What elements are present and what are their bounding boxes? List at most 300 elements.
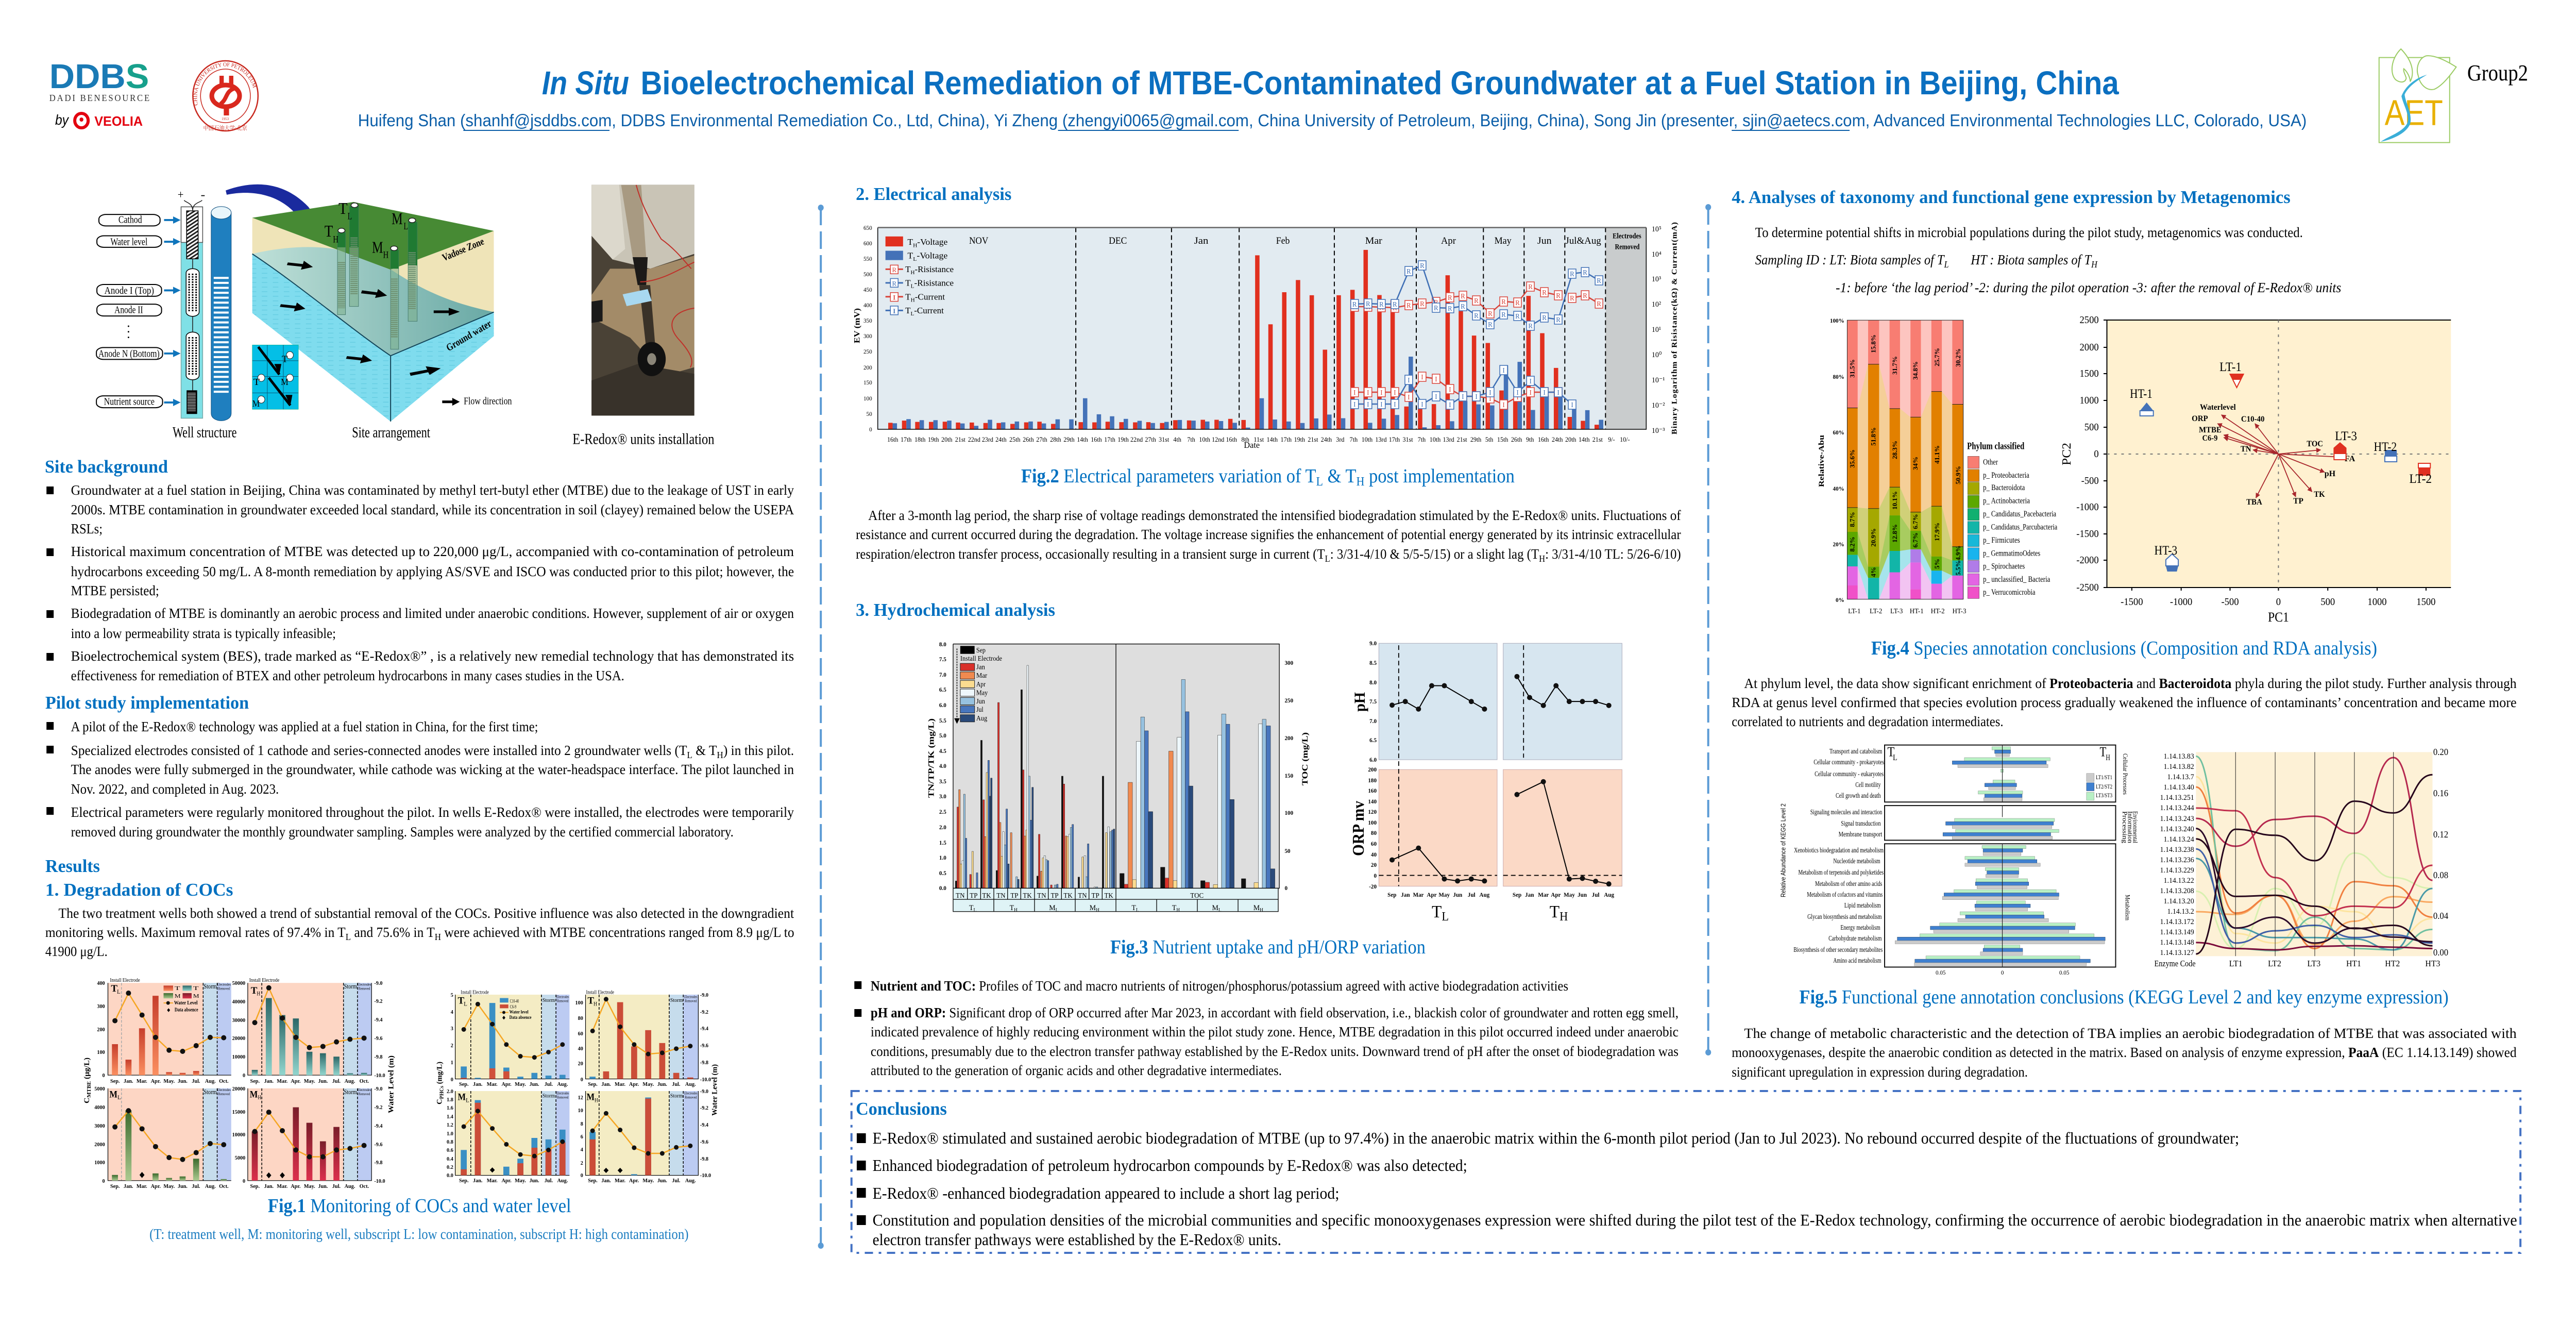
KEGG category labels: Biosynthesis of other secondary metabolites [1793, 946, 1883, 953]
enzyme labels: Enzyme Code [2155, 958, 2196, 968]
text: enzyme discussion: monooxygenases, despite the anaerobic condition as detected in the matrix. Based on analysis of enzyme expression, PaaA (EC 1.14.13.149) showed [1732, 1045, 2517, 1060]
pH and ORP labels: Jan [1525, 892, 1534, 898]
Fig.1 tick labels: -9.4 [374, 1123, 383, 1129]
Fig.3 axis labels: TK [1104, 892, 1113, 899]
pilot text: Nov. 2022, and completed in Aug. 2023. [71, 781, 279, 797]
Fig.2 axis labels: 26th [1511, 436, 1522, 443]
RDA vector labels: TP [2293, 497, 2303, 506]
Fig.1 tick labels: Sep. [459, 1082, 469, 1087]
conclusion text: Enhanced biodegradation of petroleum hydrocarbon compounds by E-Redox® was also detected; [873, 1156, 1467, 1175]
chart: Fig.2 electrical parameters: -Voltage [917, 238, 947, 247]
pH and ORP labels: 40 [1371, 851, 1377, 858]
Fig.3 axis labels: 5.5 [939, 717, 946, 724]
Fig.3 axis labels: TP [970, 892, 977, 899]
Fig.3 axis labels: TP [1010, 892, 1019, 899]
Fig.1 tick labels: Jan. [264, 1079, 274, 1084]
conclusion text [873, 1129, 2517, 1249]
Fig.1 tick labels: 5000 [235, 1155, 245, 1161]
Fig.3 axis labels: 0.5 [939, 870, 946, 877]
percentage labels: 34.8% [1912, 361, 1919, 380]
text: electrical analysis discussion: respiration/electron transfer process, occasionally resulting in a transient surge in current (T [856, 546, 1330, 562]
label arrows [164, 216, 181, 406]
phylum legend: p_ Proteobacteria [1983, 471, 2029, 479]
Fig.1 tick labels: 30000 [232, 1018, 245, 1024]
pH and ORP labels: Sep [1387, 892, 1397, 898]
Fig.2 axis labels: 29th [1063, 436, 1075, 443]
Fig.4 composition axis labels: 20% [1833, 541, 1844, 548]
enzyme grid lines [2235, 752, 2394, 956]
pH and ORP labels: ORP mv [1350, 800, 1368, 856]
Fig.3 axis labels: H [1176, 908, 1180, 913]
enzyme labels: LT1 [2229, 958, 2243, 968]
Fig.2 axis labels: 24th [1321, 436, 1332, 443]
hydrochemical text [871, 978, 1679, 1078]
Fig.3 axis labels: L [1136, 908, 1139, 913]
text: p_ Candidatus_Parcubacteria [1983, 523, 2058, 531]
Fig.2 axis labels: 10⁴ [1652, 250, 1662, 259]
legend: R [892, 280, 896, 287]
Fig.2 axis labels: 300 [863, 333, 872, 340]
KEGG category labels: Metabolism of terpenoids and polyketides [1799, 868, 1884, 876]
center line [2002, 745, 2003, 967]
Fig.1 axis titles: Water Level (m) [710, 1064, 719, 1116]
MTBE panels: Electrodes [217, 982, 231, 986]
Fig.1 tick labels: Jul. [192, 1079, 200, 1084]
Fig.1 tick labels: 10000 [232, 1132, 245, 1138]
Fig.1 tick labels: 0 [103, 1179, 105, 1184]
enzyme labels: 1.14.13.172 [2160, 918, 2194, 926]
Fig.1 tick labels: 100 [575, 1000, 583, 1006]
Fig.3 axis labels: 4.0 [939, 763, 946, 769]
enzyme labels: 1.14.13.2 [2167, 908, 2194, 916]
RDA vector labels: C10-40 [2241, 415, 2265, 424]
Fig.1 tick labels: 15000 [232, 1110, 245, 1115]
Fig.2 axis labels: 14th [1077, 436, 1088, 443]
Fig.2 axis labels: 14th [1267, 436, 1278, 443]
enzyme plot background [2196, 752, 2432, 956]
Fig.1 tick labels: Apr. [629, 1178, 639, 1184]
Fig.1 tick labels: Jul. [672, 1178, 681, 1184]
KEGG side titles: 0.05 [2059, 969, 2070, 976]
PHC panels: L [466, 1097, 469, 1103]
Fig.3 axis labels: 3.0 [939, 793, 946, 800]
panel: pilot study implementation [45, 693, 794, 840]
Fig.2 axis labels: 27th [1145, 436, 1157, 443]
pH and ORP labels: 6.5 [1369, 737, 1377, 744]
heading: metagenomics: 4. Analyses of taxonomy and functional gene expression by Metagenomics [1732, 188, 2291, 207]
Fig.3 axis labels: TN/TP/TK (mg/L) [926, 718, 936, 798]
caption: Fig.1: Fig.1 Monitoring of COCs and water level [268, 1195, 571, 1216]
month labels: Jul&Aug [1565, 236, 1601, 246]
Fig.4 composition axis labels: HT-3 [1953, 607, 1967, 615]
Fig.1 tick labels: 1.4 [447, 1114, 454, 1120]
background text: effectiveness for remediation of BTEX and other petroleum hydrocarbons in many cases studies in the USA. [71, 668, 624, 683]
text: metagenomics intro: Sampling ID : LT: Biota samples of T [1755, 252, 1950, 267]
KEGG side titles [1780, 753, 2139, 976]
Fig.4 composition axis labels: 0% [1836, 597, 1844, 603]
month labels: NOV [969, 236, 988, 246]
heading: conclusions: Conclusions [856, 1099, 947, 1119]
KEGG category labels: Metabolism of cofactors and vitamins [1807, 891, 1883, 898]
Fig.1 tick labels: Oct. [219, 1184, 229, 1189]
Fig.1 tick labels: Aug. [345, 1079, 355, 1084]
Fig.1 tick labels: Sep. [110, 1079, 120, 1084]
series: TH resistance: RRRRRRRRRRRRRRRRRRR [1352, 283, 1601, 317]
Fig.1 tick labels: 3000 [94, 1123, 105, 1129]
Fig.2 axis labels: 21st [955, 436, 965, 443]
text: phylum level discussion: At phylum level, the data show significant enrichment of Proteobacteria and Bacteroidota phyla during the pilot study. Further analysis through [1744, 676, 2517, 691]
PHC panels: Data absence [510, 1015, 531, 1020]
Fig.1 tick labels: 8 [581, 1121, 583, 1127]
RDA vector labels: FA [2345, 455, 2355, 463]
MTBE panels: M [175, 993, 181, 999]
Fig.1 tick labels: May. [642, 1082, 654, 1087]
Fig.1 tick labels: Jan. [473, 1178, 483, 1184]
Fig.1 tick labels: Mar. [137, 1079, 147, 1084]
MTBE panels: Water Level [174, 1000, 198, 1006]
pH and ORP labels: L [1442, 910, 1449, 924]
enzyme labels: 0.08 [2433, 870, 2448, 880]
enzyme curves [2196, 756, 2432, 954]
Fig.2 axis labels: 10⁻³ [1652, 427, 1665, 435]
pH and ORP series [1392, 677, 1609, 884]
RDA axes labels: -500 [2221, 596, 2239, 608]
well label pills: Water level [110, 236, 147, 247]
Fig.1 tick labels: Jan. [264, 1184, 274, 1189]
Fig.4 composition axis labels [1817, 317, 1967, 615]
Fig.2 axis labels: 11st [1253, 436, 1264, 443]
Fig.1 tick labels: 6 [581, 1134, 583, 1140]
Fig.2 axis labels: 50 [867, 411, 872, 417]
background text: Bioelectrochemical system (BES), trade marked as “E-Redox®” , is a relatively new remedial technology that has demonstrated its [71, 648, 794, 664]
MTBE panels: M [193, 993, 199, 999]
Fig.1 tick labels: Apr. [629, 1082, 639, 1087]
Fig.1 tick labels: Jul. [332, 1184, 341, 1189]
rotated block labels: Ground water [445, 318, 494, 354]
Fig.1 axis titles: C [435, 1098, 444, 1104]
logo: AET [2379, 49, 2456, 143]
pH and ORP labels: 0 [1374, 873, 1377, 879]
text: electrical analysis discussion: After a 3-month lag period, the sharp rise of voltage readings demonstrated the intensified biodegradation stimulated by the E-Redox® units. Fluctuations of [868, 508, 1681, 523]
text: metagenomics intro: H [2091, 259, 2098, 270]
Fig.2 axis labels: 19th [1117, 436, 1129, 443]
text: enzyme discussion: significant upregulation in expression during degradation. [1732, 1064, 2028, 1080]
Fig.3 axis labels: 2.5 [939, 809, 946, 815]
Fig.2 axis labels: 400 [863, 302, 872, 309]
Fig.1 tick labels: 20 [578, 1061, 583, 1067]
Fig.2 axis labels: 10⁰ [1652, 351, 1662, 359]
Fig.3 axis labels: TK [1063, 892, 1073, 899]
text: electrical analysis discussion: resistance and current occurred during the degradation. The voltage increase signifies the enhancement of potential energy generated by its intrinsic extracellular [856, 527, 1681, 542]
percentage labels: 8.2% [1849, 536, 1856, 552]
Fig.3 axis labels [926, 641, 1310, 913]
enzyme labels: 1.14.13.20 [2164, 897, 2194, 905]
Fig.1 tick labels: -9.4 [374, 1017, 383, 1023]
KEGG side titles: Metabolism [2124, 895, 2131, 920]
Fig.1 tick labels: Aug. [557, 1178, 568, 1184]
Fig.1 tick labels: 4000 [94, 1105, 105, 1111]
KEGG category labels: Signal transduction [1841, 819, 1881, 827]
heading: pilot study: Pilot study implementation [45, 693, 249, 713]
logo: China University of Petroleum: CHINA UNIVERSITY OF PETROLEUM [194, 62, 257, 105]
enzyme labels: 1.14.13.22 [2164, 877, 2194, 885]
Fig.2 axis labels: 10⁻² [1652, 401, 1665, 410]
Fig.1 tick labels: -10.0 [374, 1179, 385, 1184]
KEGG category labels: Glycan biosynthesis and metabolism [1807, 913, 1882, 920]
Fig.2 axis labels: 13rd [1375, 436, 1387, 443]
Fig.3 axis labels: T [1172, 904, 1182, 913]
Fig.3 axis labels: 100 [1284, 810, 1293, 816]
pH and ORP labels: T [1432, 902, 1442, 921]
bullets [46, 722, 54, 815]
site block: H [333, 234, 338, 245]
nutrient bars [955, 665, 1115, 888]
Fig.1 tick labels: 0 [243, 1179, 245, 1184]
percentage labels: 25.7% [1934, 348, 1941, 366]
Fig.3 axis labels: 3.5 [939, 778, 946, 785]
RDA sample labels [2130, 360, 2432, 558]
RDA vector labels: ORP [2192, 414, 2208, 423]
Fig.1 tick labels: 4 [451, 1010, 453, 1015]
caption: Fig.2: & T [1323, 465, 1357, 487]
KEGG category labels: Energy metabolism [1840, 924, 1880, 931]
PHC panels: H [594, 1000, 597, 1007]
well body with electrodes [178, 188, 205, 418]
nutrient legend: Jun [976, 697, 985, 706]
legend: L [910, 310, 914, 317]
Fig.1 tick labels: -9.0 [374, 981, 383, 986]
nutrient legend [954, 646, 1002, 724]
Fig.2 axis labels: 200 [863, 364, 872, 371]
Fig.1 tick labels: Jun. [318, 1184, 328, 1189]
nutrient legend: Install Electrode [960, 655, 1002, 663]
MTBE panels: Removed [218, 986, 230, 991]
Fig.1 tick labels: 300 [97, 1004, 105, 1010]
KEGG category labels: Membrane transport [1839, 830, 1882, 838]
well label pills: Cathod [118, 214, 142, 225]
logo: DDBS by Veolia: DADI BENESOURCE [49, 93, 149, 103]
RDA axes labels: 0 [2094, 448, 2099, 460]
Fig.2 axis labels: 28th [1050, 436, 1061, 443]
RDA axes labels: 1000 [2079, 395, 2099, 406]
Fig.1 tick labels: Apr. [291, 1184, 301, 1189]
Fig.2 axis labels: 19th [1294, 436, 1306, 443]
enzyme labels: HT2 [2385, 958, 2400, 968]
phylum legend: p_ Actinobacteria [1983, 496, 2030, 505]
Fig.1 tick labels: May. [515, 1082, 526, 1087]
pH and ORP labels: Mar [1538, 892, 1549, 898]
RDA axes labels: 1500 [2079, 368, 2099, 379]
chart: Fig.1 MTBE and PHC monitoring [82, 977, 719, 1189]
pH and ORP labels: Jun [1453, 892, 1463, 898]
phylum legend: p_ Verrucomicrobia [1983, 588, 2036, 596]
Fig.4 composition axis labels: HT-2 [1931, 607, 1945, 615]
Fig.1 tick labels: -9.2 [700, 1010, 708, 1015]
enzyme labels [2155, 747, 2448, 968]
RDA axes labels: 1500 [2416, 596, 2435, 608]
stacked columns [1847, 320, 1963, 599]
Fig.2 axis labels: 25th [1009, 436, 1021, 443]
photo: E-Redox installation [591, 185, 694, 415]
Fig.1 axis titles: C [82, 1097, 91, 1103]
hydrochemical text: indicated prevalence of highly reducing environment within the pilot study zone. Hence, MTBE degradation in this pilot occurred indeed under anaerobic [871, 1024, 1679, 1039]
results text: H [435, 932, 441, 942]
KEGG legend [2087, 774, 2112, 800]
phylum legend: Other [1983, 457, 1998, 466]
nutrient legend: Jul [976, 706, 984, 714]
pH and ORP labels: Jul [1592, 892, 1600, 898]
Fig.1 tick labels: May. [304, 1079, 315, 1084]
site block: L [403, 221, 408, 231]
KEGG panel tags: T [1887, 744, 1894, 760]
logo: DDBS by Veolia: DDBS [49, 57, 149, 95]
logo: DDBS by Veolia: by [55, 112, 69, 128]
text: metagenomics intro: L [1944, 259, 1949, 270]
enzyme labels: HT1 [2346, 958, 2361, 968]
Fig.2 axis labels: 21st [1457, 436, 1467, 443]
authors: Huifeng Shan (shanhf@jsddbs.com, DDBS Environmental Remediation Co., Ltd, China), Yi Zheng (zhengyi0065@gmail.com, China University of Petroleum, Beijing, China), Song Jin (presenter, sjin@aetecs.com, Advanced Environmental Technologies LLC, Colorado, USA) [358, 111, 2307, 130]
Fig.2 axis labels: 17th [1104, 436, 1115, 443]
Fig.3 axis labels: 8.0 [939, 641, 946, 648]
curved arrow [226, 185, 318, 221]
PHC panels: L [464, 1000, 467, 1007]
Fig.2 axis labels: EV (mV) [852, 308, 861, 343]
pH and ORP labels: 20 [1371, 862, 1377, 868]
Fig.1 tick labels: 0.8 [447, 1139, 453, 1145]
MTBE panels: L [117, 1094, 121, 1101]
Fig.2 axis labels: 10⁵ [1652, 225, 1662, 233]
Fig.1 tick labels: Mar. [137, 1184, 147, 1189]
Fig.1 tick labels: 10000 [232, 1054, 245, 1060]
KEGG category labels: Xenobiotics biodegradation and metabolism [1794, 846, 1884, 854]
Fig.1 tick labels: Mar. [615, 1178, 625, 1184]
Fig.3 axis labels: L [974, 908, 976, 913]
chart: Fig.5 key enzyme expression [2155, 747, 2448, 968]
KEGG category labels: Cell motility [1855, 781, 1881, 789]
Fig.1 tick labels: 0.0 [447, 1173, 453, 1179]
diagram: well structure, site arrangement, photo [96, 185, 715, 447]
pH and ORP labels: 7.0 [1369, 718, 1377, 725]
chart: Fig.5 KEGG level 2: H [2106, 753, 2110, 762]
text: electrical analysis discussion [856, 508, 1681, 564]
green bars LT3/ST3 [1920, 747, 2094, 959]
month labels: Mar [1365, 236, 1382, 246]
RDA axes labels: -1000 [2170, 596, 2192, 608]
percentage labels: 50.9% [1955, 466, 1962, 484]
Fig.2 axis labels: 31st [1159, 436, 1170, 443]
TOC bars [1120, 679, 1275, 888]
Fig.1 axis titles: MTBE [87, 1081, 92, 1098]
legend: H [911, 297, 915, 303]
Fig.2 axis labels: 27th [1036, 436, 1047, 443]
Fig.2 axis labels: 4th [1173, 436, 1182, 443]
Fig.1 tick labels: May. [642, 1178, 654, 1184]
enzyme labels: 1.14.13.229 [2160, 866, 2194, 875]
results text: L [346, 932, 351, 942]
RDA axes labels: -1500 [2076, 528, 2099, 540]
plot frame and table [953, 644, 1279, 912]
percentage labels: 28.3% [1892, 441, 1899, 459]
PHC panels: Storm [670, 1092, 683, 1099]
background text: Historical maximum concentration of MTBE was detected up to 220,000 μg/L, accompanied with co-contamination of petroleum [71, 544, 794, 559]
Fig.1 tick labels: 5 [451, 993, 453, 998]
Fig.1 tick labels: Jul. [545, 1082, 553, 1087]
KEGG category labels: Metabolism of other amino acids [1815, 880, 1882, 887]
Fig.2 axis labels: 0 [869, 426, 872, 433]
nutrient legend: Aug [976, 715, 987, 723]
percentage labels: 12.8% [1892, 524, 1899, 543]
Fig.2 axis labels: 21st [1592, 436, 1603, 443]
Fig.3 axis labels: TN [1078, 892, 1087, 899]
background text: 2000s. MTBE contamination in groundwater exceeded local standard, while its concentration in soil (clayey) remained below the USEPA [71, 502, 794, 517]
Fig.1 tick labels: 2 [581, 1161, 583, 1166]
percentage labels: 10.1% [1892, 491, 1899, 510]
site block: T [338, 199, 347, 217]
Fig.3 axis labels: TN [996, 892, 1006, 899]
Fig.2 axis labels: 16th [1226, 436, 1238, 443]
MTBE panels: Removed [359, 986, 370, 991]
Fig.1 tick labels: Mar. [615, 1082, 625, 1087]
Fig.1 tick labels: Apr. [291, 1079, 301, 1084]
legend: R [892, 266, 896, 274]
conclusions frame [852, 1091, 2520, 1253]
ORP panels [1379, 769, 1622, 886]
Fig.1 tick labels: 0.6 [447, 1148, 453, 1153]
Fig.1 tick labels: Jan. [601, 1082, 611, 1087]
Fig.1 tick labels: -9.2 [700, 1105, 708, 1111]
percentage labels: 6.7% [1912, 532, 1919, 548]
caption: Fig.3: Fig.3 Nutrient uptake and pH/ORP variation [1110, 936, 1426, 958]
PHC panels: Install Electrode [461, 989, 489, 995]
Fig.1 tick labels: -10.0 [374, 1073, 385, 1079]
logo: China University of Petroleum: 中国石油大学·北京 [204, 125, 247, 131]
Fig.3 axis labels: TOC (mg/L) [1300, 732, 1310, 785]
Fig.3 axis labels: T [1131, 904, 1141, 913]
Fig.1 tick labels: Sep. [588, 1178, 598, 1184]
results text: monitoring wells. Maximum removal rates of 97.4% in T [45, 925, 342, 940]
caption: Fig.2: Fig.2 Electrical parameters variation of T [1021, 465, 1322, 487]
conclusion text: Constitution and population densities of the microbial communities and specific monooxygenases expression were shifted during the pilot test of the E-Redox technology, confirming the occurrence of aerobic biodegradation in the anaerobic matrix when alternative [873, 1211, 2517, 1229]
pH and ORP labels: 100 [1368, 819, 1377, 826]
rotated block labels [441, 236, 494, 354]
RDA vector labels: Waterlevel [2200, 403, 2236, 412]
caption: Fig.4: Fig.4 Species annotation conclusions (Composition and RDA analysis) [1871, 637, 2377, 659]
percentage labels: 20.9% [1870, 528, 1877, 547]
nutrient legend: May [976, 689, 988, 697]
Fig.1 tick labels: Apr. [151, 1184, 161, 1189]
Fig.1 tick labels: 10 [578, 1108, 583, 1114]
caption: Fig.1 [149, 1195, 688, 1243]
Fig.2 axis labels: 24th [995, 436, 1007, 443]
PHC panels: Removed [685, 999, 697, 1003]
chart: Fig.2 electrical parameters: -Voltage [917, 251, 947, 261]
month labels: Jun [1537, 236, 1552, 246]
well body with electrodes: + [178, 188, 183, 201]
pilot text: Specialized electrodes consisted of 1 cathode and series-connected anodes were installed into 2 groundwater wells (T [71, 743, 678, 758]
Fig.3 axis labels: 200 [1284, 735, 1293, 742]
legend: T [905, 292, 919, 301]
Fig.1 tick labels: Aug. [205, 1079, 216, 1084]
MTBE panels: Storm [344, 983, 357, 991]
Fig.2 axis labels: 150 [863, 379, 872, 386]
Fig.2 axis labels: 22nd [1130, 436, 1143, 443]
Fig.1 tick labels: Jun. [178, 1079, 188, 1084]
pH and ORP labels: T [1550, 902, 1560, 921]
Fig.3 axis labels: M [1253, 904, 1263, 913]
MTBE panels: M [250, 1088, 258, 1100]
chart: Fig.4 phylum composition [1817, 317, 2058, 615]
blue bars LT2/ST2 [1897, 750, 2105, 963]
